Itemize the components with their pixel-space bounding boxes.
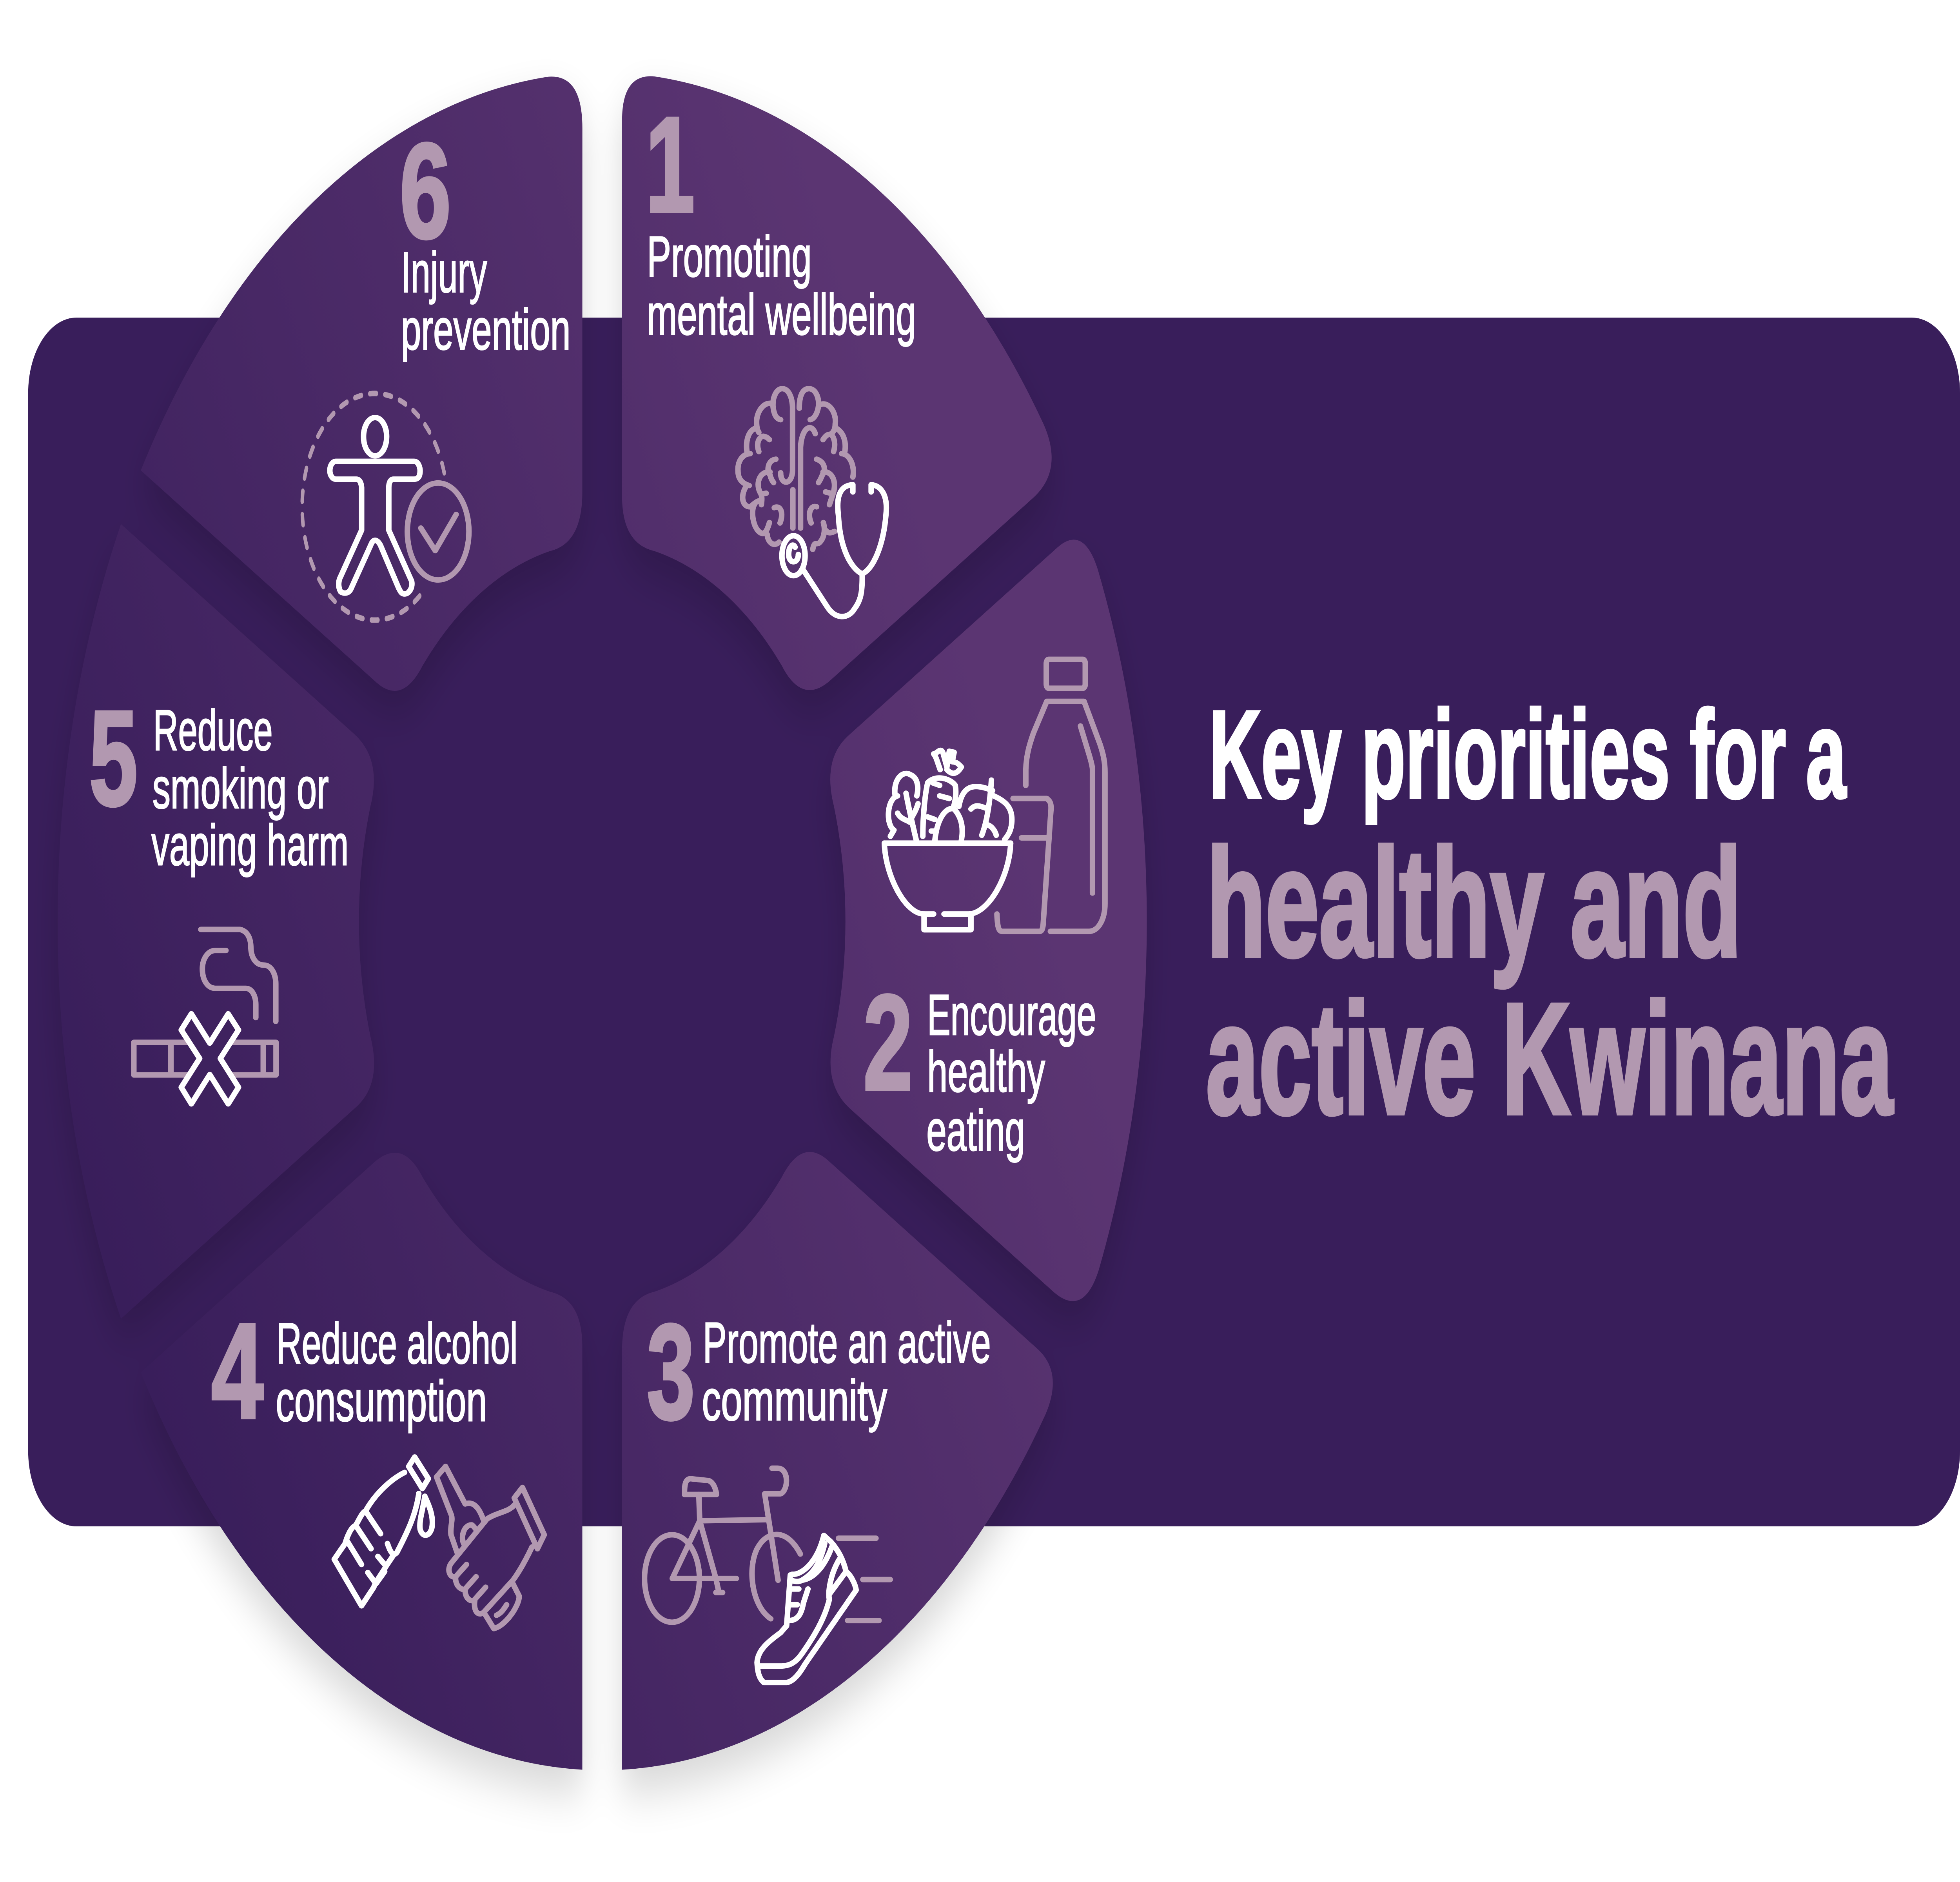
- icon part: bottle with drop: [334, 1457, 432, 1606]
- label: encourage healthy eating: healthy: [927, 1040, 1045, 1104]
- label: reduce alcohol consumption: Reduce alcohol: [276, 1312, 518, 1376]
- label: encourage healthy eating: Encourage: [927, 983, 1096, 1047]
- segment shape 5: [58, 524, 374, 1319]
- number 3: 3: [647, 1297, 695, 1448]
- icon: crossed out cigarette: [134, 930, 276, 1104]
- number 6: 6: [400, 116, 451, 267]
- label: injury prevention: Injury: [401, 240, 487, 305]
- panel: priority 2 encourage healthy eating: [830, 540, 1147, 1301]
- panel: priority 1 promoting mental wellbeing: [622, 76, 1052, 690]
- label: reduce alcohol consumption: consumption: [276, 1369, 487, 1433]
- title line 2: healthy and: [1207, 817, 1742, 990]
- label: promote an active community: Promote an active: [703, 1311, 991, 1375]
- panel: priority 5 reduce smoking or vaping harm: [58, 524, 374, 1319]
- background panel: [28, 318, 1960, 1526]
- number 1: 1: [646, 89, 695, 240]
- label: reduce smoking or vaping harm: smoking or: [152, 756, 329, 821]
- icon: bottle and hand holding beer: [334, 1457, 544, 1629]
- panel: priority 6 injury prevention: [141, 76, 583, 691]
- icon: brain and stethoscope: [738, 389, 886, 617]
- icon part: stethoscope: [782, 485, 886, 617]
- icon part: salad bowl: [884, 750, 1012, 930]
- title line 3: active Kwinana: [1206, 970, 1893, 1147]
- title: [1206, 685, 1893, 1147]
- icon part: brain: [738, 389, 853, 549]
- icon part: cigarette and smoke: [134, 930, 276, 1075]
- segment shadows: [58, 76, 1147, 1770]
- label: promoting mental wellbeing: Promoting: [647, 225, 812, 289]
- icon: body in dashed circle with check: [302, 394, 469, 620]
- segment shape 2: [830, 540, 1147, 1301]
- icon part: check badge: [407, 483, 469, 580]
- icon part: human figure: [330, 418, 420, 594]
- segment shape 4: [141, 1153, 582, 1770]
- segment shape 3: [622, 1152, 1053, 1770]
- panel: priority 4 reduce alcohol consumption: [141, 1153, 582, 1770]
- label: injury prevention: prevention: [401, 298, 570, 362]
- icon part: dashed circle: [302, 394, 444, 620]
- label: promote an active community: community: [702, 1368, 887, 1433]
- segment shape 1: [622, 76, 1052, 690]
- icon part: shoe: [757, 1535, 856, 1682]
- number 4: 4: [211, 1296, 264, 1447]
- icon part: glass and bottle: [997, 659, 1105, 931]
- icon: bicycle and running shoe: [644, 1468, 890, 1682]
- number 2: 2: [863, 967, 913, 1118]
- label: promoting mental wellbeing: mental wellbeing: [647, 283, 916, 347]
- title line 1: Key priorities for a: [1209, 685, 1846, 825]
- panel: priority 3 promote an active community: [622, 1152, 1053, 1770]
- label: encourage healthy eating: eating: [926, 1099, 1025, 1163]
- icon part: hand holding beer: [437, 1466, 544, 1629]
- icon part: cross: [181, 1014, 238, 1104]
- segment shape 6: [141, 76, 583, 691]
- icon part: bicycle: [644, 1468, 890, 1622]
- label: reduce smoking or vaping harm: Reduce: [153, 698, 273, 763]
- icon: salad bowl, glass and bottle: [884, 659, 1105, 931]
- label: reduce smoking or vaping harm: vaping harm: [151, 813, 348, 877]
- number 5: 5: [89, 683, 138, 834]
